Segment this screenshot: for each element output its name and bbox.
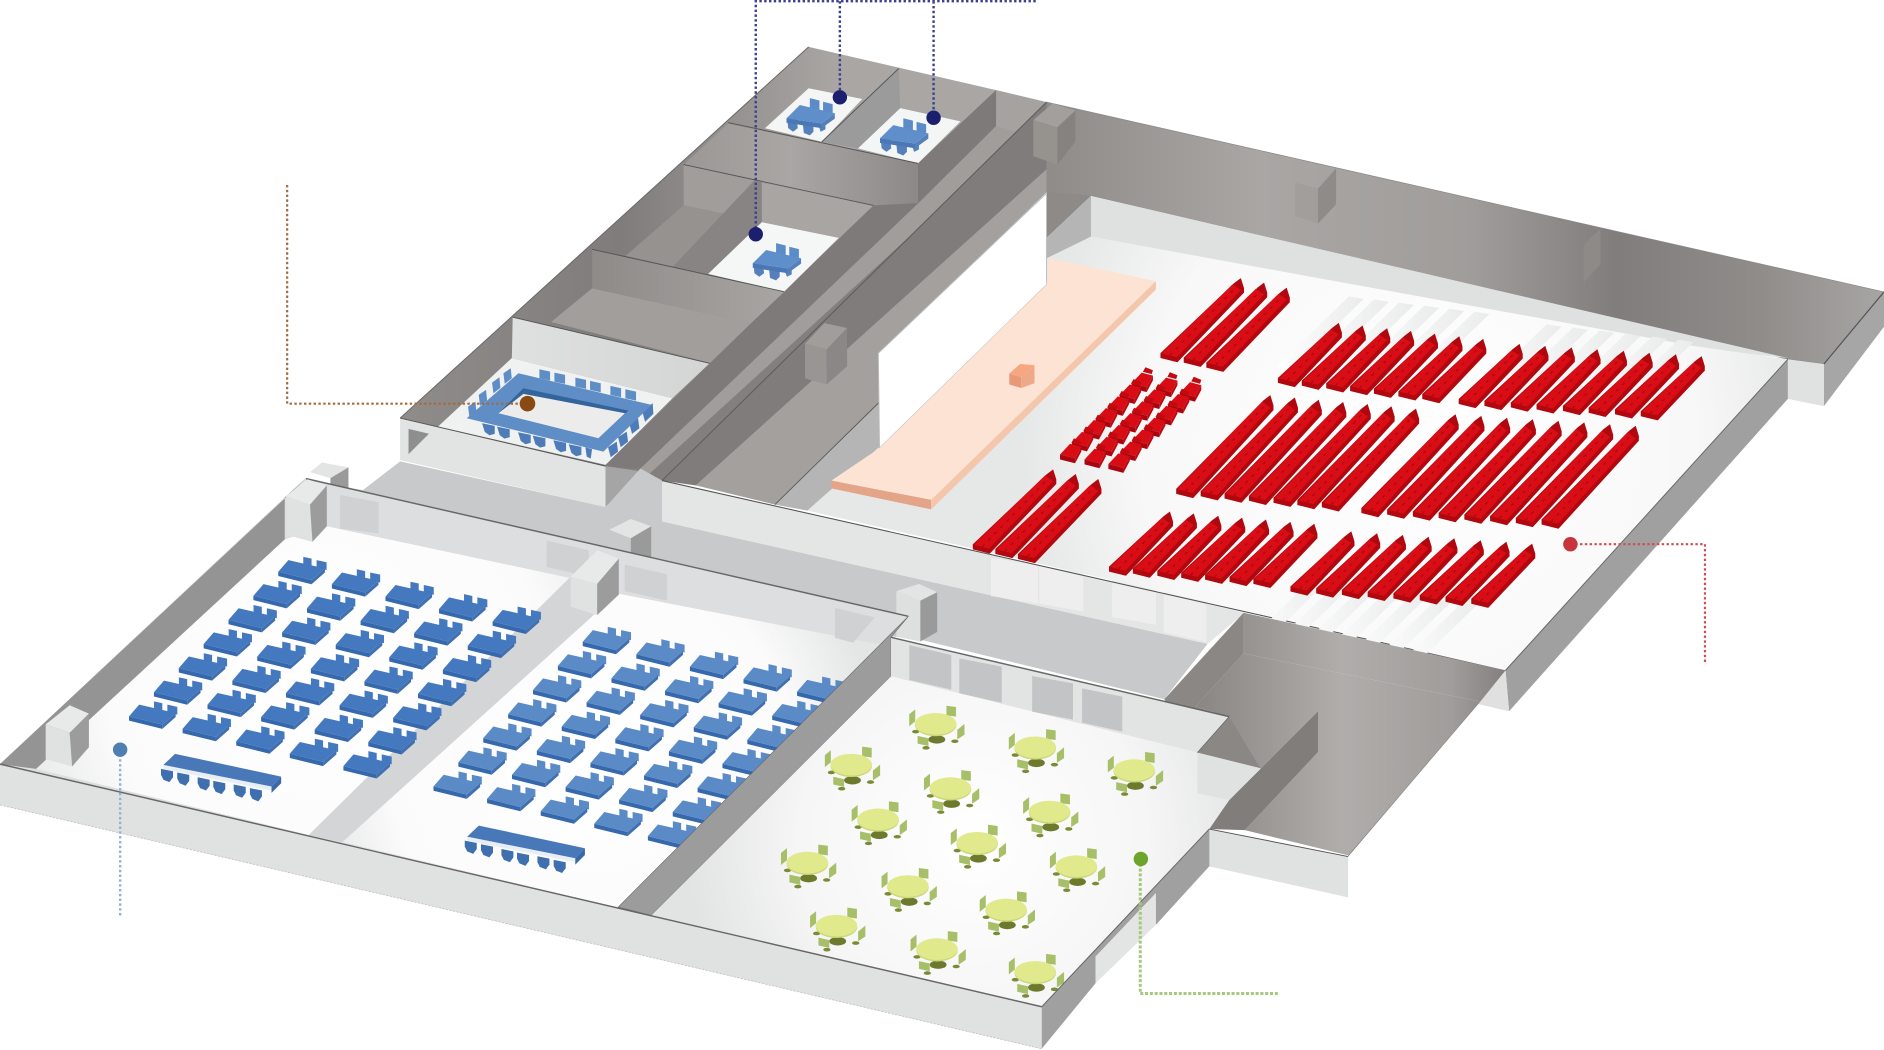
seat block: lower left bbox=[1109, 511, 1317, 588]
seat block: rear upper left bbox=[1278, 323, 1486, 403]
blue conference hall: walls and floors bbox=[0, 478, 908, 907]
callout: banquet hall bbox=[1134, 852, 1278, 994]
auditorium floor and rear wall bbox=[807, 196, 1788, 711]
callout: boardroom bbox=[287, 185, 535, 411]
long table: left room bbox=[161, 754, 281, 801]
building shell: rear wall bbox=[1047, 102, 1884, 406]
auditorium red seating bbox=[973, 278, 1705, 608]
corridor pillars bbox=[310, 463, 937, 642]
seat block: lower right bbox=[1290, 531, 1535, 608]
table: small meeting room 1 bbox=[787, 98, 835, 135]
seat block: centre right bbox=[1361, 414, 1639, 529]
classroom desks: left room bbox=[129, 557, 541, 779]
projection screen bbox=[878, 193, 1047, 448]
callout: conference hall bbox=[113, 742, 127, 917]
banquet hall right wall bbox=[1042, 829, 1209, 1049]
corridor floor bbox=[306, 461, 1208, 699]
seat block: upper front bbox=[1160, 278, 1290, 372]
banquet hall floor and walls bbox=[651, 637, 1260, 1007]
seat block: middle front bbox=[1060, 367, 1201, 473]
service pit behind the halls bbox=[1164, 613, 1506, 897]
seat block: lower front bbox=[973, 469, 1101, 563]
stage bbox=[831, 258, 1156, 509]
table: small meeting room 3 bbox=[753, 243, 801, 280]
dividing wall between halls bbox=[618, 616, 908, 915]
table: small meeting room 2 bbox=[880, 118, 928, 155]
seat block: rear upper right bbox=[1459, 344, 1705, 420]
seat block: centre left bbox=[1176, 395, 1419, 511]
lectern bbox=[1009, 364, 1035, 388]
small meeting rooms bbox=[551, 68, 961, 363]
hall pillars bbox=[46, 479, 619, 766]
boardroom hollow-square table bbox=[467, 368, 653, 459]
front exterior wall bbox=[0, 764, 1042, 1049]
classroom desks: right room bbox=[434, 627, 845, 849]
boardroom bbox=[400, 317, 710, 507]
meeting-room wing shell bbox=[400, 47, 1075, 511]
callout: auditorium bbox=[1563, 537, 1705, 662]
banquet round tables bbox=[781, 706, 1163, 998]
long table: right room bbox=[465, 826, 585, 873]
callout: small meeting rooms bbox=[749, 1, 1036, 241]
auditorium front wall bbox=[662, 481, 1506, 670]
